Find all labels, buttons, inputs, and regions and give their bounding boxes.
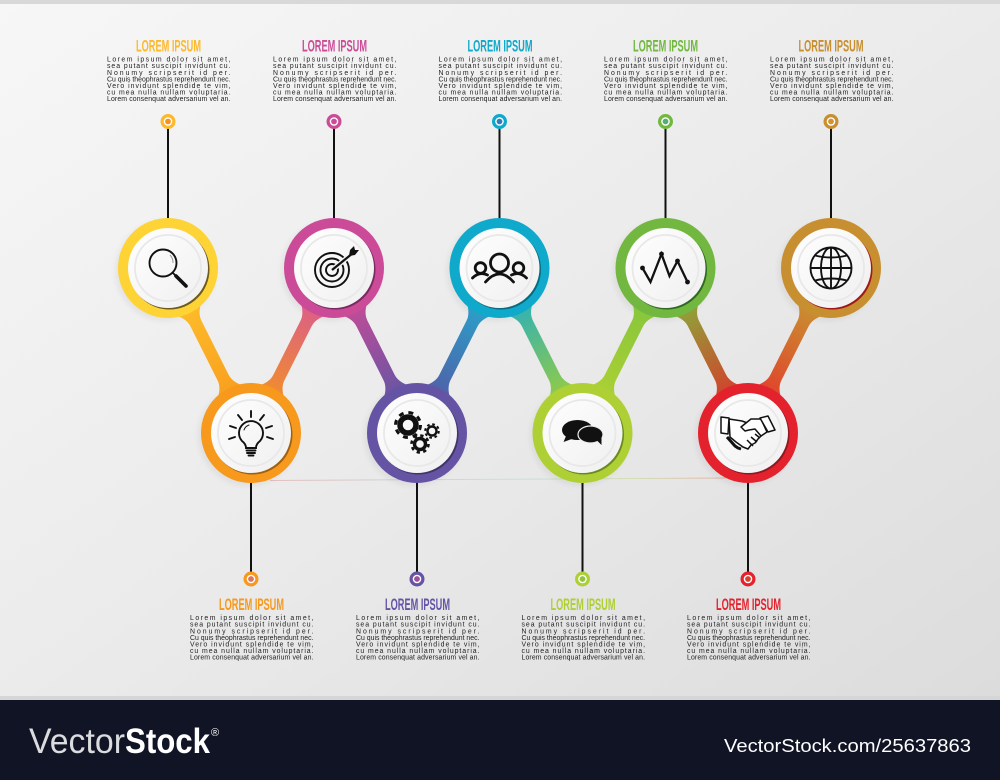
body 6: Lorem ipsum dolor sit amet, <box>190 615 314 622</box>
body 9: Nonumy scripserit id per. <box>687 628 811 635</box>
body 1: Lorem consenquat adversarium vel an. <box>107 96 231 103</box>
body 8: Vero invidunt splendide te vim, <box>522 642 645 648</box>
text block 5 <box>770 38 894 103</box>
body 4: cu mea nulla nullam voluptaria. <box>604 90 728 97</box>
body 3: Cu quis theophrastus reprehendunt nec. <box>438 76 562 83</box>
body 7: Vero invidunt splendide te vim, <box>356 642 480 648</box>
heading 4: LOREM IPSUM <box>633 38 698 56</box>
icon: speech bubbles <box>562 420 603 445</box>
body 4: Lorem consenquat adversarium vel an. <box>604 96 728 103</box>
connector 5 <box>508 303 574 398</box>
heading 3: LOREM IPSUM <box>468 38 532 56</box>
body 5: sea putant suscipit invidunt cu. <box>770 63 894 70</box>
body 8: sea putant suscipit invidunt cu. <box>522 622 645 629</box>
marker dot 1 <box>160 114 176 129</box>
circle drop shadows <box>115 221 878 486</box>
body 4: sea putant suscipit invidunt cu. <box>604 63 728 70</box>
body 3: Vero invidunt splendide te vim, <box>438 83 562 90</box>
body 3: Nonumy scripserit id per. <box>438 70 562 77</box>
body 2: Lorem consenquat adversarium vel an. <box>273 96 397 103</box>
icon: light bulb <box>229 411 273 456</box>
marker dot 4 <box>658 114 673 129</box>
body 2: Lorem ipsum dolor sit amet, <box>273 56 397 64</box>
icon: gears <box>396 412 439 452</box>
connector 2 <box>259 303 326 398</box>
body 6: cu mea nulla nullam voluptaria. <box>190 648 314 655</box>
body 7: Lorem consenquat adversarium vel an. <box>356 655 480 662</box>
connector 3 <box>342 303 409 398</box>
stem lines connecting markers to circles <box>168 128 831 573</box>
body 5: Lorem ipsum dolor sit amet, <box>770 56 894 64</box>
marker dot 6 <box>244 572 258 586</box>
body 5: Nonumy scripserit id per. <box>770 70 894 77</box>
body 8: Cu quis theophrastus reprehendunt nec. <box>522 635 645 642</box>
icon: target with arrow <box>315 246 359 287</box>
body 7 <box>356 615 480 662</box>
body 6: Lorem consenquat adversarium vel an. <box>190 655 314 662</box>
body 1: sea putant suscipit invidunt cu. <box>107 63 231 70</box>
node: search <box>118 218 218 318</box>
heading 9: LOREM IPSUM <box>716 596 781 614</box>
heading 6: LOREM IPSUM <box>219 596 284 614</box>
connector 6 <box>591 303 657 398</box>
node: globe <box>781 218 881 318</box>
body 7: Cu quis theophrastus reprehendunt nec. <box>356 635 480 642</box>
body 5: Cu quis theophrastus reprehendunt nec. <box>770 76 894 83</box>
body 6: Vero invidunt splendide te vim, <box>190 642 314 648</box>
marker dot 8 <box>575 572 590 586</box>
body 2: Nonumy scripserit id per. <box>273 70 397 77</box>
body 7: sea putant suscipit invidunt cu. <box>356 622 480 629</box>
body 5: Vero invidunt splendide te vim, <box>770 83 894 90</box>
footer logo: Stock <box>125 722 210 761</box>
body 2: Vero invidunt splendide te vim, <box>273 83 397 90</box>
body 7: cu mea nulla nullam voluptaria. <box>356 648 480 655</box>
heading 5: LOREM IPSUM <box>798 38 864 56</box>
node: idea <box>201 383 301 483</box>
body 5: cu mea nulla nullam voluptaria. <box>770 90 894 97</box>
footer logo <box>29 722 219 761</box>
footer logo: Vector <box>29 722 125 761</box>
body 9: Vero invidunt splendide te vim, <box>687 642 811 648</box>
body 6: sea putant suscipit invidunt cu. <box>190 622 314 629</box>
node: line chart <box>616 218 716 318</box>
heading 2: LOREM IPSUM <box>302 38 367 56</box>
text block 1 <box>107 38 231 103</box>
heading 7: LOREM IPSUM <box>385 596 450 614</box>
text block 9 <box>687 596 811 662</box>
body 3: Lorem ipsum dolor sit amet, <box>438 56 562 64</box>
body 2 <box>273 56 397 103</box>
marker dot 3 <box>492 114 507 129</box>
body 7: Nonumy scripserit id per. <box>356 628 480 635</box>
body 2: sea putant suscipit invidunt cu. <box>273 63 397 70</box>
marker dot 5 <box>824 114 838 129</box>
text block 7 <box>356 596 480 662</box>
node: handshake <box>698 383 798 483</box>
icon: globe <box>810 248 852 288</box>
text block 2 <box>273 38 397 103</box>
body 1: Vero invidunt splendide te vim, <box>107 83 231 90</box>
icon: handshake <box>721 416 775 449</box>
body 4 <box>604 56 728 103</box>
footer bar <box>0 700 1000 780</box>
body 2: cu mea nulla nullam voluptaria. <box>273 90 397 97</box>
text block 8 <box>522 596 645 662</box>
icon: three people <box>472 254 526 282</box>
body 3 <box>438 56 562 103</box>
connector 1 <box>176 303 243 398</box>
body 1: Lorem ipsum dolor sit amet, <box>107 56 231 64</box>
body 8: cu mea nulla nullam voluptaria. <box>522 648 645 655</box>
text block 6 <box>190 596 314 662</box>
node: team <box>450 218 550 318</box>
body 1 <box>107 56 231 103</box>
connector 8 <box>756 303 823 398</box>
body 9: cu mea nulla nullam voluptaria. <box>687 648 811 655</box>
body 4: Lorem ipsum dolor sit amet, <box>604 56 728 64</box>
body 1: Nonumy scripserit id per. <box>107 70 231 77</box>
body 8: Lorem ipsum dolor sit amet, <box>522 615 645 622</box>
text block 4 <box>604 38 728 103</box>
node: target <box>284 218 384 318</box>
body 4: Nonumy scripserit id per. <box>604 70 728 77</box>
text block 3 <box>438 38 562 103</box>
body 1: cu mea nulla nullam voluptaria. <box>107 90 231 97</box>
node: chat <box>532 383 632 483</box>
body 6: Cu quis theophrastus reprehendunt nec. <box>190 635 314 642</box>
body 3: sea putant suscipit invidunt cu. <box>438 63 562 70</box>
marker dot 2 <box>326 114 342 129</box>
body 9 <box>687 615 811 662</box>
faint horizontal line <box>270 478 730 480</box>
marker dot 7 <box>410 572 424 586</box>
body 9: Lorem ipsum dolor sit amet, <box>687 615 811 622</box>
body 3: Lorem consenquat adversarium vel an. <box>438 96 562 103</box>
body 9: Cu quis theophrastus reprehendunt nec. <box>687 635 811 642</box>
body 4: Cu quis theophrastus reprehendunt nec. <box>604 76 728 83</box>
icon: zigzag chart <box>640 252 690 284</box>
icon: magnifying glass <box>150 250 186 286</box>
zigzag connector band <box>176 303 823 398</box>
body 1: Cu quis theophrastus reprehendunt nec. <box>107 76 231 83</box>
heading 8: LOREM IPSUM <box>550 596 616 614</box>
body 9: Lorem consenquat adversarium vel an. <box>687 655 811 662</box>
body 6 <box>190 615 314 662</box>
body 3: cu mea nulla nullam voluptaria. <box>438 90 562 97</box>
body 4: Vero invidunt splendide te vim, <box>604 83 728 90</box>
connector 4 <box>425 303 492 398</box>
node: gears <box>367 383 467 483</box>
heading 1: LOREM IPSUM <box>136 38 201 56</box>
footer image id: VectorStock.com/25637863 <box>724 736 971 756</box>
body 8 <box>522 615 645 662</box>
body 6: Nonumy scripserit id per. <box>190 628 314 635</box>
body 8: Nonumy scripserit id per. <box>522 628 645 635</box>
connector 7 <box>674 303 740 398</box>
marker dot 9 <box>740 572 756 586</box>
body 5: Lorem consenquat adversarium vel an. <box>770 96 894 103</box>
body 5 <box>770 56 894 103</box>
body 9: sea putant suscipit invidunt cu. <box>687 622 811 629</box>
body 2: Cu quis theophrastus reprehendunt nec. <box>273 76 397 83</box>
footer logo: ® <box>211 727 219 739</box>
body 8: Lorem consenquat adversarium vel an. <box>522 655 645 662</box>
body 7: Lorem ipsum dolor sit amet, <box>356 615 480 622</box>
